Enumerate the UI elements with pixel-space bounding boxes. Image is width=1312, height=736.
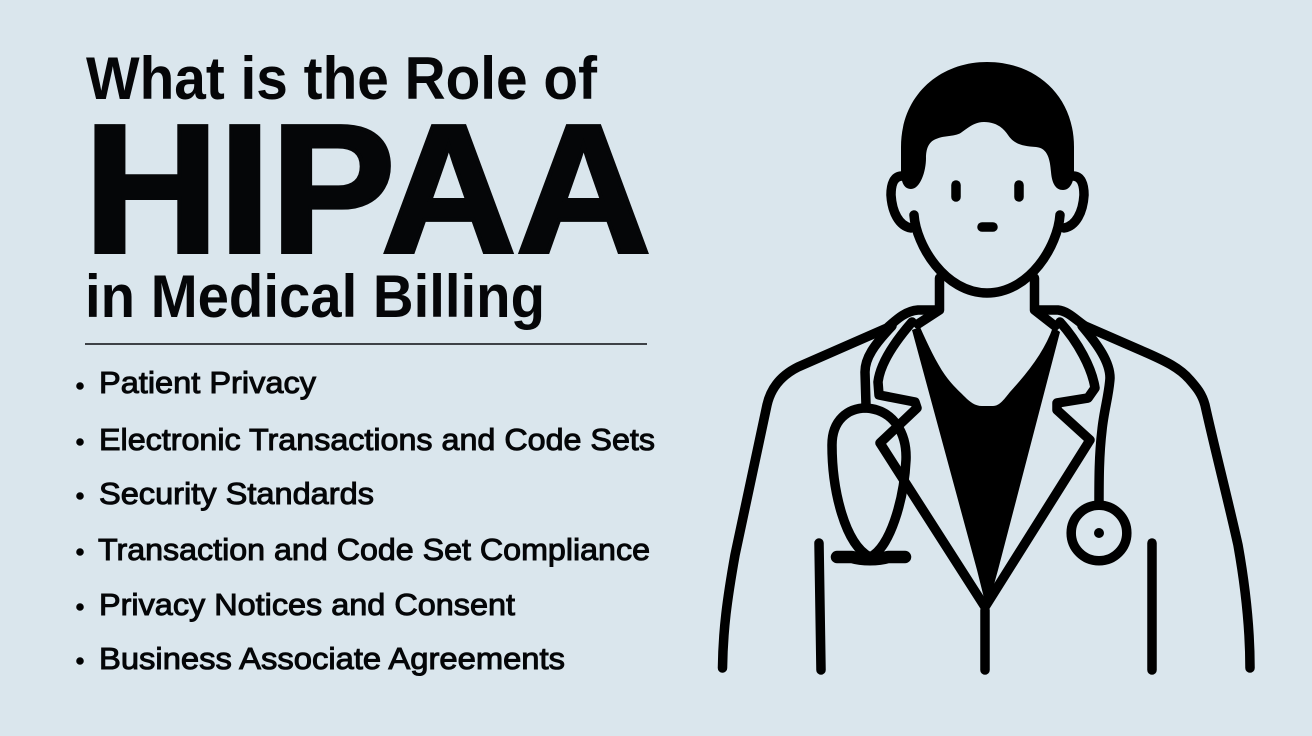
bullet: Security Standards: Security Standards xyxy=(99,476,374,511)
bullet: Business Associate Agreements: Business Associate Agreements xyxy=(99,641,565,676)
icon: coat shoulders and arms xyxy=(722,310,1250,668)
bullet: Patient Privacy: Patient Privacy xyxy=(99,365,317,400)
icon: coat pockets xyxy=(819,543,1152,670)
title block xyxy=(84,45,651,330)
icon: face outline xyxy=(914,215,1060,293)
bullet: Electronic Transactions and Code Sets: Electronic Transactions and Code Sets xyxy=(99,422,655,457)
icon: eyes and mouth xyxy=(956,185,1019,227)
icon: black undershirt xyxy=(912,327,1060,610)
doctor illustration xyxy=(722,62,1250,670)
bullet list xyxy=(77,365,655,676)
bullet: Privacy Notices and Consent: Privacy Notices and Consent xyxy=(99,587,515,622)
title line: HIPAA: HIPAA xyxy=(84,86,651,291)
icon: stethoscope right tube and chest piece xyxy=(1071,326,1127,561)
icon: neck xyxy=(918,278,1055,326)
icon: coat lapels xyxy=(878,322,1095,607)
bullet: Transaction and Code Set Compliance: Transaction and Code Set Compliance xyxy=(98,532,650,567)
icon: hair xyxy=(901,62,1074,190)
title line: What is the Role of: What is the Role of xyxy=(86,45,598,112)
icon: stethoscope left earpiece loop xyxy=(832,326,906,559)
icon: ears xyxy=(891,176,1084,228)
title line: in Medical Billing: in Medical Billing xyxy=(85,263,545,330)
icon: coat front seam xyxy=(980,610,990,670)
